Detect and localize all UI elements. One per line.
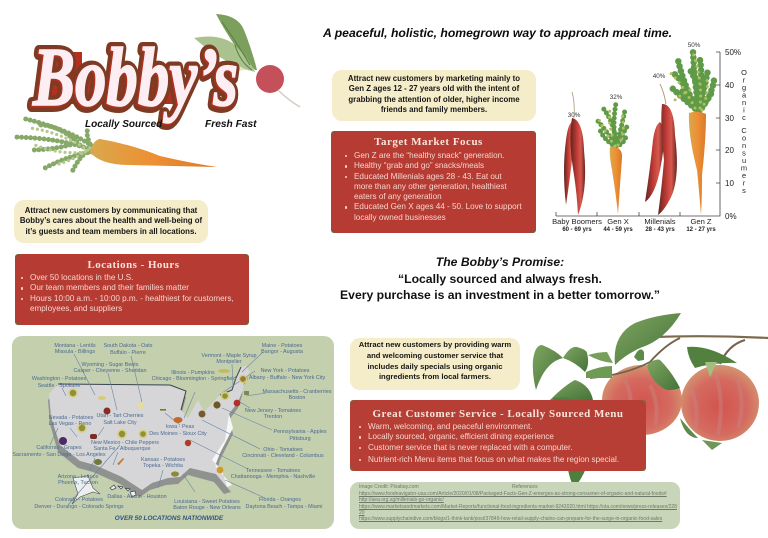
carrot: Millenials xyxy=(645,84,677,215)
map location labels: Trenton xyxy=(264,414,282,420)
chart axis ticks: 40 xyxy=(725,81,734,90)
chart axis ticks xyxy=(725,48,741,221)
callout: health and well-being: Bobby’s cares about the health and well-being of xyxy=(20,216,202,225)
map produce icons xyxy=(59,369,249,477)
chart category labels: Gen Z xyxy=(690,217,712,226)
promise statement xyxy=(340,255,660,302)
map location labels: Cincinnati - Cleveland - Columbus xyxy=(242,453,324,459)
list: target market: Educated Millenials ages 28 - 43. Eat out xyxy=(354,172,502,181)
chart category labels: 12 - 27 yrs xyxy=(686,227,716,233)
list: customer service xyxy=(359,422,619,464)
map location labels: Santa Fe - Albuquerque xyxy=(94,446,150,452)
map: United States xyxy=(48,366,250,504)
map location labels: Washington - Potatoes xyxy=(32,376,86,382)
list: target market: more than any other generation, healthiest xyxy=(354,182,507,191)
logo wordmark: Bobby’s xyxy=(31,32,237,125)
chart percent labels: 32% xyxy=(610,94,623,101)
map location labels: Salt Lake City xyxy=(103,420,137,426)
reference links: https://www.foodnavigator-usa.com/Article/2020/01/08/Packaged-Facts-Gen-Z-emerges-as-strong-consumer-of-organic-and-natural-foods# xyxy=(359,491,667,497)
map location labels: Dallas - Austin - Houston xyxy=(107,494,167,500)
map location labels: Seattle - Spokane xyxy=(38,383,80,389)
logo wordmark: Bobby’s xyxy=(31,32,237,125)
chart axis ticks: 20 xyxy=(725,146,734,155)
heading: locations: Locations - Hours xyxy=(88,259,180,271)
callout: health and well-being xyxy=(14,200,208,243)
map location labels: Ohio - Tomatoes xyxy=(263,447,303,453)
list: target market: Educated Gen X ages 44 - 50. Love to support xyxy=(354,202,522,211)
callout: customer service: Attract new customers by providing warm xyxy=(359,340,511,349)
map location labels: Chattanooga - Memphia - Nashville xyxy=(231,474,315,480)
map leader lines xyxy=(50,352,272,505)
heading: target market: Target Market Focus xyxy=(374,136,483,148)
map location labels: Denver - Durango - Colorado Springs xyxy=(34,504,124,510)
map location labels: Maine - Potatoes xyxy=(262,343,303,349)
map location labels: Missula - Billings xyxy=(55,349,95,355)
list: target market xyxy=(345,151,522,222)
map location labels: Pittsburg xyxy=(289,436,311,442)
promise statement: The Bobby’s Promise: xyxy=(436,255,564,269)
chart percent labels xyxy=(568,42,701,119)
chart vertical axis title: e xyxy=(742,171,746,180)
map location labels: Iowa - Peas xyxy=(166,424,195,430)
chart axis ticks: 50% xyxy=(725,48,741,57)
chart vertical axis title: o xyxy=(742,134,746,142)
map location labels: Arizona - Lettuce xyxy=(58,474,98,480)
logo tagline: locally sourced: Locally Sourced xyxy=(85,119,163,130)
map location labels: Topeka - Wichita xyxy=(143,463,183,469)
chart vertical axis title: m xyxy=(741,164,747,172)
title: A peaceful, holistic, homegrown way to approach meal time. xyxy=(323,26,672,40)
references heading: References xyxy=(512,484,538,490)
chart axis ticks: 0% xyxy=(725,212,737,221)
promise statement: “Locally sourced and always fresh. xyxy=(398,272,602,286)
callout: customer service xyxy=(350,338,520,390)
map location labels: Illinois - Pumpkins xyxy=(171,370,215,376)
callout: marketing to Gen Z: friends and family members. xyxy=(381,105,487,114)
chart vertical axis title: C xyxy=(741,126,747,135)
map location labels: New Jersey - Tomatoes xyxy=(245,408,301,414)
chart category labels: 60 - 69 yrs xyxy=(562,227,592,233)
list: locations: Hours 10:00 a.m. - 10:00 p.m. - healthiest for customers, xyxy=(30,294,234,303)
list: locations: Over 50 locations in the U.S. xyxy=(30,273,133,282)
map location labels: New York - Potatoes xyxy=(261,368,310,374)
chart axis ticks: 10 xyxy=(725,179,734,188)
chart category labels xyxy=(552,217,716,233)
callout: marketing to Gen Z xyxy=(332,70,536,121)
callout: marketing to Gen Z: Attract new customers by marketing mainly to xyxy=(348,74,520,83)
logo tagline: fresh fast: Fresh Fast xyxy=(205,119,257,130)
map location labels: California - Grapes xyxy=(36,445,82,451)
image credit: Image Credit: Pixabay.com xyxy=(359,484,419,490)
list: locations xyxy=(21,273,234,313)
map location labels: Des Moines - Sioux City xyxy=(149,431,207,437)
list: customer service: Customer service that is never replaced with a computer. xyxy=(368,443,573,452)
list: customer service: Nutrient-rich Menu items that focus on what makes the region special. xyxy=(368,455,619,464)
map location labels: Boston xyxy=(289,395,305,401)
callout: marketing to Gen Z: grabbing the attention of older, higher income xyxy=(348,95,520,104)
carrot: Baby Boomers xyxy=(564,92,585,215)
panel: locations and hours xyxy=(15,254,249,325)
callout: health and well-being: Attract new customers by communicating that xyxy=(25,206,197,215)
chart category labels: Gen X xyxy=(607,217,629,226)
map caption: OVER 50 LOCATIONS NATIONWIDE xyxy=(115,515,224,522)
chart axes xyxy=(556,52,720,216)
map location labels: Montpelier xyxy=(216,359,242,365)
panel: target market focus xyxy=(331,131,536,233)
chart category labels: Millenials xyxy=(644,217,676,226)
chart vertical axis title: u xyxy=(742,156,746,165)
map location labels: Louisiana - Sweet Potatoes xyxy=(174,499,240,505)
chart vertical axis title xyxy=(741,68,747,195)
map location labels: Albany - Buffalo - New York City xyxy=(249,375,325,381)
list: target market: eaters of any generation xyxy=(354,192,442,201)
heading: customer service: Great Customer Service - Locally Sourced Menu xyxy=(372,408,624,420)
reference links: http://aea.org.sg/millenials-go-organic/ xyxy=(359,497,444,503)
map location labels: Daytona Beach - Tampa - Miami xyxy=(246,504,322,510)
map location labels xyxy=(12,343,332,511)
chart vertical axis title: O xyxy=(741,68,747,77)
map location labels: Las Vegas - Reno xyxy=(49,421,91,427)
chart percent labels: 40% xyxy=(653,73,666,80)
list: customer service: Locally sourced, organic, efficient dining experience xyxy=(368,432,554,441)
callout: customer service: includes daily specials using organic xyxy=(367,362,503,371)
map location labels: Phoenix, Tucson xyxy=(58,480,98,486)
map location labels: Colorado - Potatoes xyxy=(55,497,103,503)
list: customer service: Warm, welcoming, and peaceful environment. xyxy=(368,422,533,431)
chart category labels: 44 - 59 yrs xyxy=(603,227,633,233)
chart vertical axis title: n xyxy=(742,98,746,107)
callout: marketing to Gen Z: Gen Z ages 12 - 27 years old with the intent of xyxy=(349,84,519,93)
map location labels: Vermont - Maple Syrup xyxy=(201,353,257,359)
carrot: Gen X xyxy=(597,103,628,214)
callout: customer service: and welcoming customer service that xyxy=(367,351,503,360)
chart vertical axis title: n xyxy=(742,141,746,150)
map location labels: Pennsylvania - Apples xyxy=(273,429,327,435)
chart vertical axis title: s xyxy=(742,148,746,158)
list: target market: Healthy “grab and go” snacks/meals xyxy=(354,161,484,170)
panel: great customer service xyxy=(350,400,646,471)
map location labels: New Mexico - Chile Peppers xyxy=(91,440,159,446)
callout: health and well-being: it’s guests and team members in all locations. xyxy=(25,227,196,236)
icon: carrot xyxy=(14,118,217,172)
list: locations: employees, and suppliers xyxy=(30,304,122,313)
chart vertical axis title: a xyxy=(742,90,747,100)
chart category labels: 28 - 43 yrs xyxy=(645,227,675,233)
chart axis ticks: 30 xyxy=(725,114,734,123)
map location labels: Massachusetts - Cranberries xyxy=(263,389,332,395)
map location labels: Chicago - Bloomington - Springfield xyxy=(152,376,236,382)
chart vertical axis title: r xyxy=(743,76,746,84)
chart vertical axis title: g xyxy=(742,83,746,92)
chart percent labels: 50% xyxy=(688,42,701,49)
chart vertical axis title: s xyxy=(742,186,746,195)
chart vertical axis title: r xyxy=(743,178,746,188)
callout: customer service: ingredients from local farmers. xyxy=(379,372,491,381)
map location labels: Nevada - Potatoes xyxy=(49,415,94,421)
panel: references xyxy=(350,482,680,529)
map location labels: South Dakota - Oats xyxy=(104,343,153,349)
reference links xyxy=(359,491,677,522)
carrot: Gen Z xyxy=(667,50,714,215)
map location labels: Montana - Lentils xyxy=(54,343,96,349)
reference links: https://www.marketsandmarkets.com/Market-Reports/functional-food-ingredients-market-9242020.html https://ota.com/news/press-releases/22820 xyxy=(359,504,677,516)
map location labels: Bangor - Augusta xyxy=(261,349,303,355)
promise statement: Every purchase is an investment in a better tomorrow.” xyxy=(340,288,660,302)
list: target market: Gen Z are the “healthy snack” generation. xyxy=(354,151,504,160)
map location labels: Tennessee - Tomatoes xyxy=(246,468,300,474)
reference links: https://www.supplychaindive.com/blogs/1-think-tank/post/37849-how-retail-supply-chains-can-prepare-for-the-surge-in-organic-food-sales xyxy=(359,516,662,522)
chart vertical axis title: i xyxy=(743,106,745,114)
chart vertical axis title: c xyxy=(742,113,746,122)
list: target market: locally owned businesses xyxy=(354,213,446,222)
list: locations: Our team members and their families matter xyxy=(30,283,189,292)
map location labels: Sacramento - San Diego - Los Angeles xyxy=(12,452,106,458)
map location labels: Florida - Oranges xyxy=(259,497,301,503)
chart percent labels: 30% xyxy=(568,112,581,119)
map location labels: Kansas - Potatoes xyxy=(141,457,185,463)
icon: radish xyxy=(194,14,300,107)
map location labels: Baton Rouge - New Orleans xyxy=(173,505,241,511)
map location labels: Buffalo - Pierre xyxy=(110,350,146,356)
map location labels: Casper - Cheyenne - Sheridan xyxy=(73,368,147,374)
chart category labels: Baby Boomers xyxy=(552,217,602,226)
map location labels: Wyoming - Sugar Beets xyxy=(82,362,139,368)
map location labels: Utah - Tart Cherries xyxy=(97,413,144,419)
logo wordmark: Bobby’s xyxy=(32,31,238,124)
